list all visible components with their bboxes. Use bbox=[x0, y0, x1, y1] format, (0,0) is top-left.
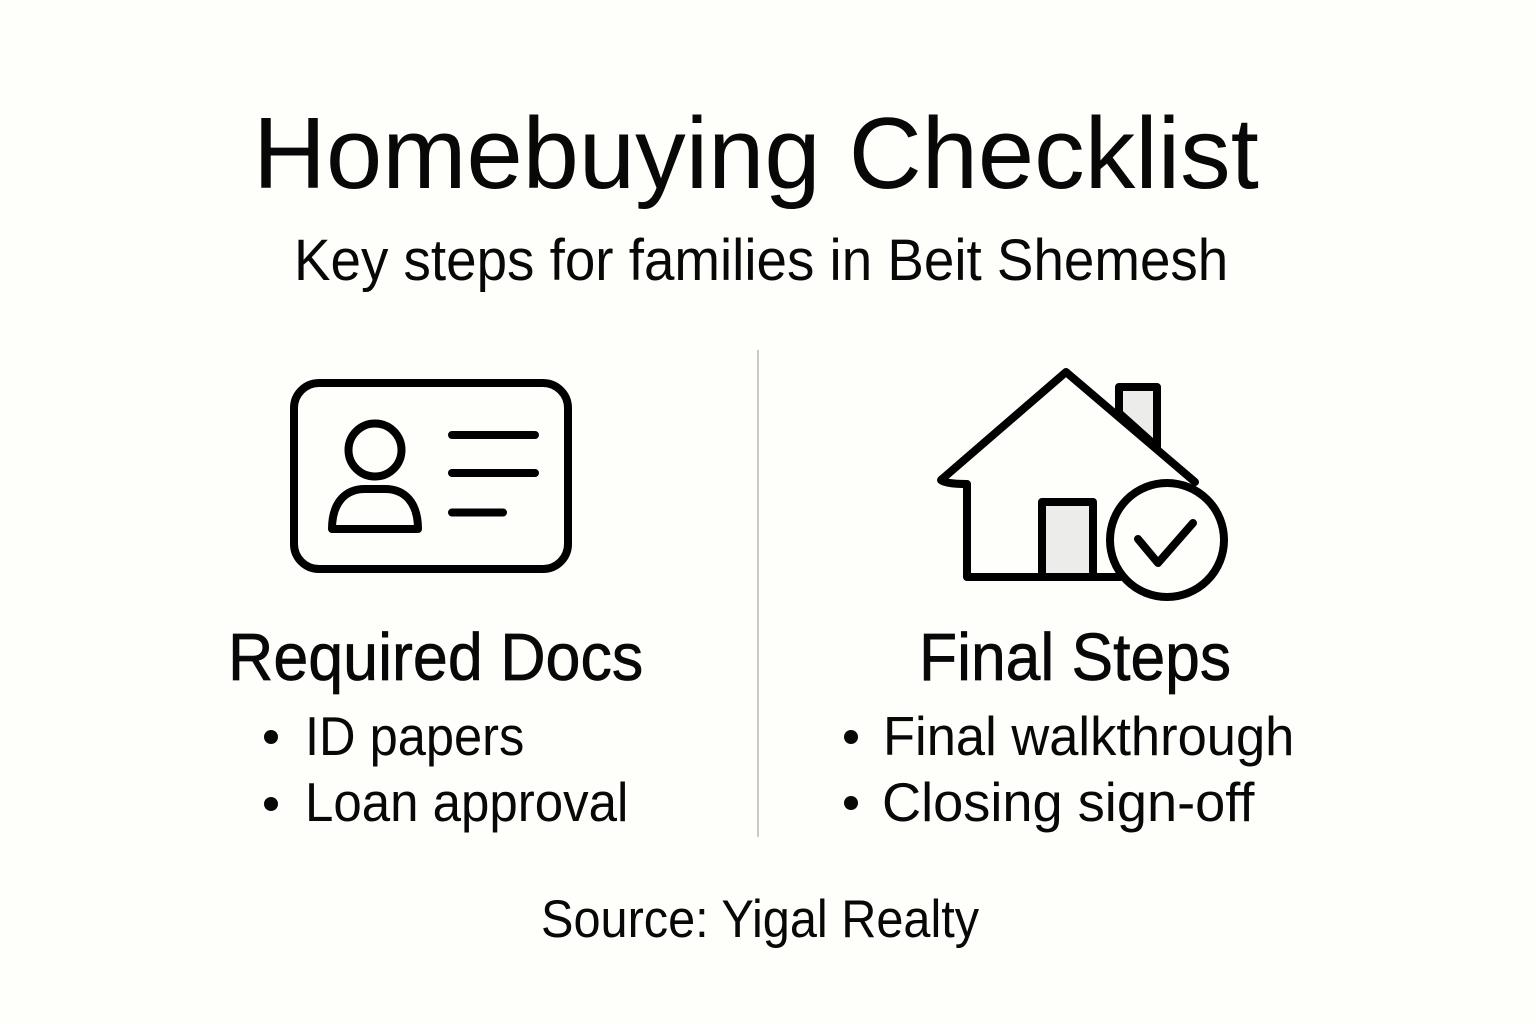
panel: required docs bbox=[228, 620, 643, 833]
panel: final steps bbox=[844, 620, 1294, 833]
subtitle: Key steps for families in Beit Shemesh bbox=[294, 228, 1228, 293]
bullet: ID papers: ID papers bbox=[305, 706, 524, 767]
title: Homebuying Checklist bbox=[253, 98, 1259, 210]
icon: house with check badge bbox=[937, 368, 1228, 601]
icon: ID card bbox=[290, 379, 572, 573]
heading: final steps: Final Steps bbox=[919, 620, 1231, 695]
divider line bbox=[757, 350, 759, 837]
bullet: closing sign-off: Closing sign-off bbox=[882, 772, 1254, 833]
bullet: final walkthrough: Final walkthrough bbox=[883, 706, 1294, 767]
bullet: loan approval: Loan approval bbox=[305, 772, 628, 833]
heading: required docs: Required Docs bbox=[228, 620, 643, 695]
source note: Source: Yigal Realty bbox=[541, 890, 979, 948]
